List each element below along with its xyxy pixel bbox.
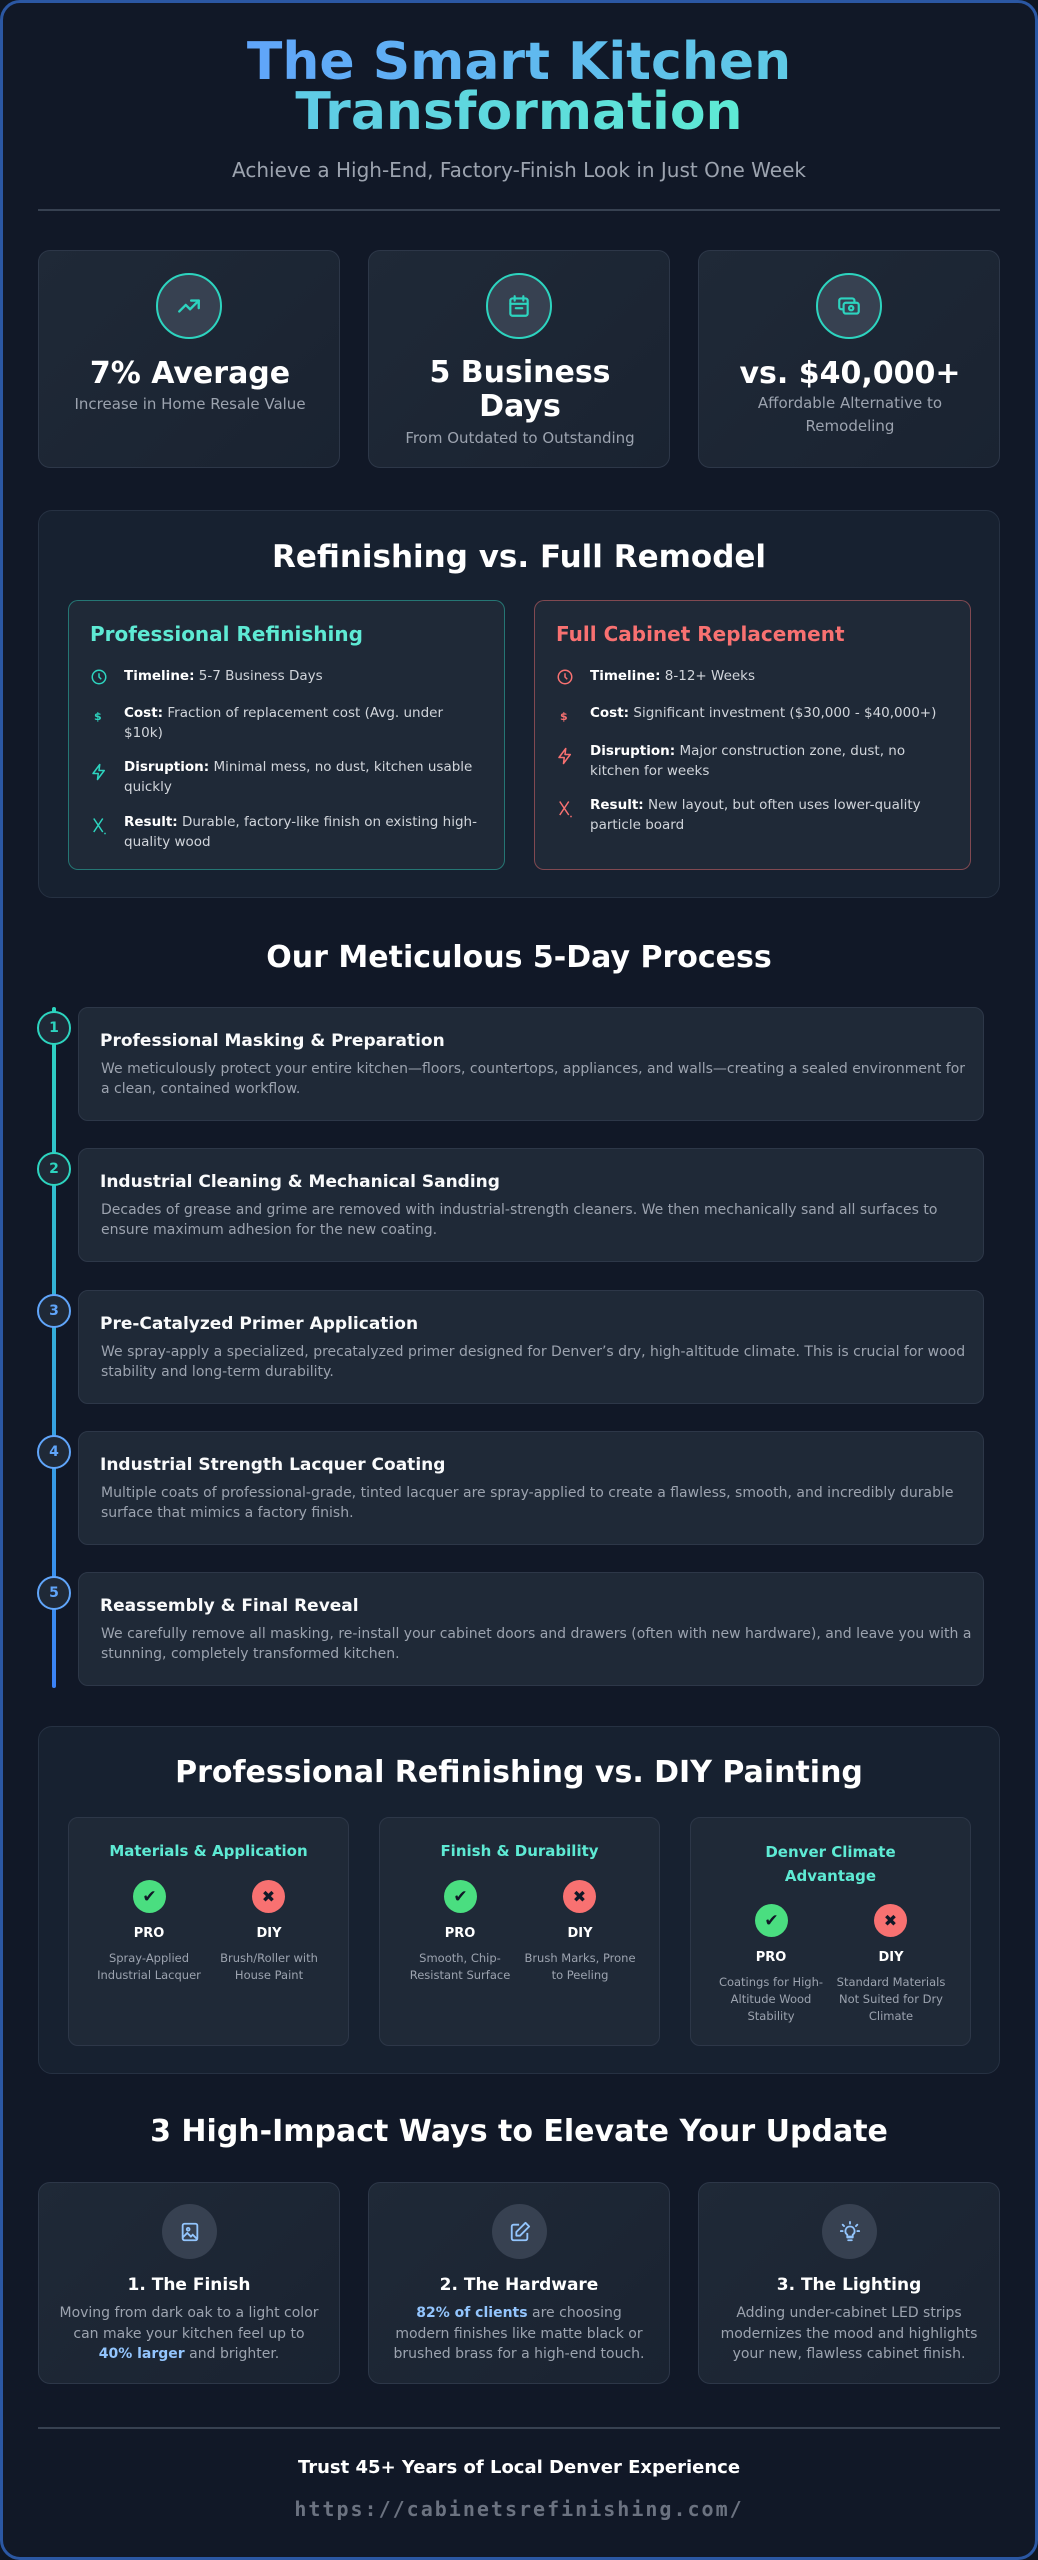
- card: materials: [68, 1817, 349, 2046]
- card: climate: DIY: [878, 1950, 904, 1965]
- step 2: [37, 1148, 984, 1262]
- card: finish: Brush Marks, Prone to Peeling: [524, 1951, 636, 1982]
- card: climate: ✔: [764, 1910, 779, 1930]
- item cost: $: [94, 710, 102, 723]
- stat text: [74, 356, 306, 413]
- footer: url: https://cabinetsrefinishing.com/: [294, 2497, 744, 2521]
- step 2: 2: [49, 1161, 59, 1177]
- card: full replacement: [534, 600, 971, 870]
- card: finish: ✔: [453, 1886, 468, 1906]
- step 2: Industrial Cleaning & Mechanical Sanding: [100, 1172, 500, 1192]
- card: lighting: [698, 2182, 1000, 2384]
- title: The Smart Kitchen: [247, 32, 791, 92]
- card: finish: Finish & Durability: [440, 1842, 599, 1860]
- heading: high-impact ways: 3 High-Impact Ways to Elevate Your Update: [150, 2114, 888, 2149]
- card: finish: [379, 1817, 660, 2046]
- title: Transformation: [295, 82, 743, 142]
- icon: bulb: [822, 2204, 877, 2259]
- icon: calendar: [486, 273, 552, 339]
- step 4: Multiple coats of professional-grade, tinted lacquer are spray-applied to create a flawless, smooth, and incredibly durable surface that mimics a factory finish.: [101, 1485, 953, 1521]
- card: climate: Advantage: [785, 1867, 876, 1885]
- step 3: Pre-Catalyzed Primer Application: [100, 1314, 418, 1334]
- card: climate: Denver Climate: [765, 1843, 896, 1861]
- card: materials: Materials & Application: [109, 1842, 308, 1860]
- card: materials: Spray-Applied Industrial Lacquer: [97, 1951, 201, 1982]
- step 3: We spray-apply a specialized, precatalyzed primer designed for Denver’s dry, high-altitude climate. This is crucial for wood stability and long-term durability.: [101, 1344, 965, 1380]
- stat card: cost: [698, 250, 1000, 468]
- stat text: From Outdated to Outstanding: [405, 429, 635, 447]
- icon: money: [816, 273, 882, 339]
- item cost: $: [560, 710, 568, 723]
- card: climate: [690, 1817, 971, 2046]
- card: hardware: 2. The Hardware: [440, 2275, 598, 2295]
- stat card: days: [368, 250, 670, 468]
- card: climate: Standard Materials Not Suited for Dry Climate: [837, 1975, 945, 2023]
- step 5: We carefully remove all masking, re-install your cabinet doors and drawers (often with new hardware), and leave you with a stunning, completely transformed kitchen.: [101, 1626, 971, 1662]
- card: materials: ✖: [262, 1887, 275, 1906]
- heading: Professional Refinishing vs. DIY Painting: [175, 1755, 863, 1790]
- step 5: Reassembly & Final Reveal: [100, 1596, 359, 1616]
- card: finish: 1. The Finish: [128, 2275, 250, 2295]
- timeline line: [52, 1007, 56, 1688]
- panel: pro vs diy: [38, 1726, 1000, 2074]
- item cost: Cost: Significant investment ($30,000 - $40,000+): [590, 705, 936, 721]
- subtitle: Achieve a High-End, Factory-Finish Look in Just One Week: [232, 158, 806, 182]
- card: materials: Brush/Roller with House Paint: [220, 1951, 318, 1982]
- icon: trending up: [156, 273, 222, 339]
- card: finish: PRO: [445, 1926, 475, 1941]
- card: lighting: Adding under-cabinet LED strips modernizes the mood and highlights your new, flawless cabinet finish.: [721, 2305, 977, 2362]
- item timeline: Timeline: 5-7 Business Days: [124, 668, 323, 684]
- stat text: 5 Business: [429, 355, 611, 390]
- item result: Result: New layout, but often uses lower-quality particle board: [590, 797, 921, 833]
- card: finish: DIY: [567, 1926, 593, 1941]
- card: full replacement: Full Cabinet Replacement: [556, 622, 845, 646]
- step 5: [37, 1572, 984, 1686]
- card: lighting: 3. The Lighting: [777, 2275, 921, 2295]
- step 3: [37, 1290, 984, 1404]
- footer: trust: Trust 45+ Years of Local Denver Experience: [298, 2457, 740, 2478]
- card: finish: Smooth, Chip-Resistant Surface: [410, 1951, 510, 1982]
- step 1: We meticulously protect your entire kitchen—floors, countertops, appliances, and walls—creating a sealed environment for a clean, contained workflow.: [101, 1061, 965, 1097]
- item cost: Cost: Fraction of replacement cost (Avg. under $10k): [124, 705, 443, 741]
- step 1: [37, 1007, 984, 1121]
- step 4: 4: [49, 1444, 59, 1460]
- card: materials: PRO: [134, 1926, 164, 1941]
- card: finish: [38, 2182, 340, 2384]
- icon: image: [162, 2204, 217, 2259]
- icon: edit: [492, 2204, 547, 2259]
- stat text: Days: [479, 389, 561, 424]
- stat text: [405, 355, 635, 447]
- card: materials: ✔: [142, 1886, 157, 1906]
- step 4: Industrial Strength Lacquer Coating: [100, 1455, 445, 1475]
- stat text: 7% Average: [90, 356, 290, 391]
- step 1: 1: [49, 1020, 59, 1036]
- card: climate: PRO: [756, 1950, 786, 1965]
- card: climate: ✖: [884, 1911, 897, 1930]
- step 1: Professional Masking & Preparation: [100, 1031, 445, 1051]
- card: professional refinishing: [68, 600, 505, 870]
- card: materials: DIY: [256, 1926, 282, 1941]
- step 4: [37, 1431, 984, 1545]
- card: hardware: 82% of clients are choosing modern finishes like matte black or brushed brass for a high-end touch.: [394, 2305, 644, 2362]
- card: hardware: [368, 2182, 670, 2384]
- heading: Refinishing vs. Full Remodel: [272, 539, 766, 575]
- item timeline: Timeline: 8-12+ Weeks: [590, 668, 755, 684]
- step 5: 5: [49, 1585, 59, 1601]
- panel: refinishing vs remodel: [38, 510, 1000, 898]
- stat text: [739, 356, 961, 435]
- step 3: 3: [49, 1303, 59, 1319]
- card: professional refinishing: Professional Refinishing: [90, 622, 363, 646]
- item disruption: Disruption: Major construction zone, dust, no kitchen for weeks: [590, 743, 905, 779]
- card: finish: Moving from dark oak to a light color can make your kitchen feel up to 40% larger and brighter.: [59, 2305, 319, 2362]
- card: climate: Coatings for High-Altitude Wood Stability: [719, 1975, 823, 2023]
- title: [247, 32, 791, 142]
- stat text: vs. $40,000+: [739, 356, 961, 391]
- card: finish: ✖: [573, 1887, 586, 1906]
- stat text: Increase in Home Resale Value: [74, 395, 306, 413]
- stat text: Affordable Alternative to Remodeling: [758, 394, 942, 435]
- stat card: resale: [38, 250, 340, 468]
- step 2: Decades of grease and grime are removed with industrial-strength cleaners. We then mechanically sand all surfaces to ensure maximum adhesion for the new coating.: [101, 1202, 937, 1238]
- heading: process: Our Meticulous 5-Day Process: [266, 940, 772, 975]
- item result: Result: Durable, factory-like finish on existing high-quality wood: [124, 814, 477, 850]
- item disruption: Disruption: Minimal mess, no dust, kitchen usable quickly: [124, 759, 472, 795]
